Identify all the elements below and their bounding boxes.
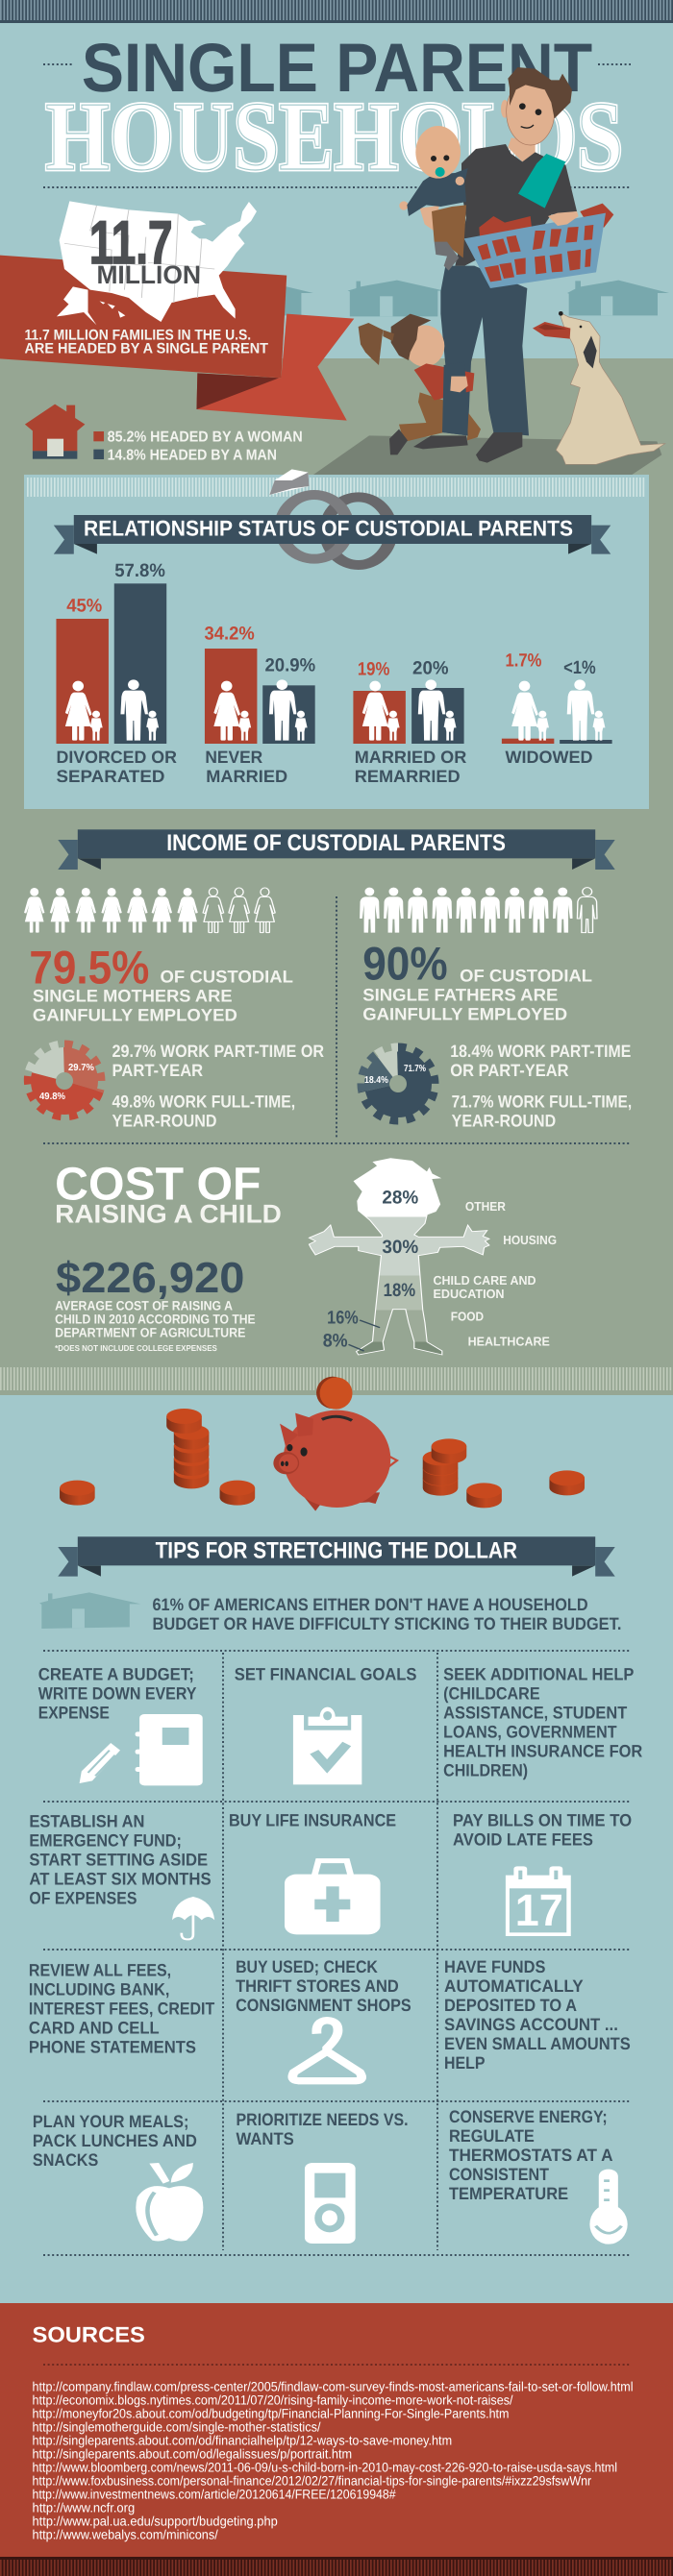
tip: create a budget: EXPENSE	[38, 1703, 110, 1722]
work breakdown: mothers	[112, 1042, 324, 1131]
legend: woman: 85.2% HEADED BY A WOMAN	[108, 428, 303, 445]
footnote: *DOES NOT INCLUDE COLLEGE EXPENSES	[55, 1343, 217, 1353]
child chart labels: OTHER	[465, 1200, 506, 1214]
gear chart: mothers: 29.7%	[68, 1063, 94, 1073]
budget statistic	[152, 1595, 621, 1633]
bars: married or remarried: REMARRIED	[355, 767, 461, 786]
work breakdown: fathers: OR PART-YEAR	[450, 1061, 569, 1080]
sources list	[32, 2379, 633, 2541]
cost description: DEPARTMENT OF AGRICULTURE	[55, 1325, 245, 1339]
legend: man	[93, 446, 277, 463]
girl	[359, 314, 481, 454]
tip: emergency fund: START SETTING ASIDE	[29, 1851, 208, 1870]
tip: review all fees	[29, 1961, 214, 2057]
tip: seek additional help	[443, 1664, 642, 1779]
panel: sources	[0, 2303, 673, 2558]
bars: never married: MARRIED	[206, 767, 287, 786]
sources list: http://singlemotherguide.com/single-mother-statistics/	[32, 2419, 321, 2434]
cost description: CHILD IN 2010 ACCORDING TO THE	[55, 1312, 256, 1326]
laundry basket	[464, 204, 613, 288]
tip: pay bills on time	[453, 1811, 632, 1936]
banner: relationship status	[54, 515, 611, 554]
tip: conserve energy: TEMPERATURE	[449, 2184, 568, 2203]
ribbon caption: ARE HEADED BY A SINGLE PARENT	[24, 339, 268, 356]
red ribbon	[0, 256, 354, 421]
child body chart: 30%	[382, 1237, 418, 1257]
tip: conserve energy: REGULATE	[449, 2126, 535, 2146]
falling coin	[316, 1377, 353, 1410]
bars: married or remarried: 20%	[412, 657, 449, 678]
work breakdown: fathers: YEAR-ROUND	[452, 1112, 556, 1131]
ground: hero and income sections	[0, 358, 673, 1395]
tip: automatic deposits: HAVE FUNDS	[444, 1957, 545, 1976]
child chart labels: CHILD CARE AND	[433, 1274, 536, 1288]
tip: automatic deposits	[444, 1957, 631, 2073]
loose coins	[60, 1470, 585, 1508]
tip: plan your meals: PACK LUNCHES AND	[33, 2131, 197, 2150]
work breakdown: mothers: 49.8% WORK FULL-TIME,	[112, 1092, 295, 1112]
baby	[399, 126, 468, 271]
title dotted rules	[43, 64, 631, 187]
legend: man: 14.8% HEADED BY A MAN	[108, 446, 277, 463]
child body chart: 8%	[323, 1330, 348, 1351]
tip: review all fees: CARD AND CELL	[29, 2019, 160, 2038]
tip: conserve energy	[449, 2107, 628, 2245]
top stripe band	[0, 0, 673, 23]
family illustration	[313, 67, 669, 475]
tip: create a budget: CREATE A BUDGET;	[38, 1664, 194, 1683]
tip: automatic deposits: DEPOSITED TO A	[444, 1996, 577, 2015]
tip: pay bills on time: AVOID LATE FEES	[453, 1830, 593, 1850]
tip: automatic deposits: AUTOMATICALLY	[444, 1976, 584, 1996]
tip grid dotted rules	[43, 1651, 631, 2255]
statistic: mothers	[29, 941, 293, 1025]
panel: relationship status	[24, 475, 649, 809]
statistic: fathers: SINGLE FATHERS ARE	[362, 986, 558, 1005]
background house right	[567, 281, 669, 315]
sources list: http://www.pal.ua.edu/support/budgeting.php	[32, 2514, 278, 2528]
bars: married or remarried: MARRIED OR	[355, 748, 466, 767]
piggy bank	[273, 1411, 397, 1511]
background houses	[258, 281, 444, 316]
stripe band: ground to blue	[0, 1367, 673, 1390]
statistic: mothers: SINGLE MOTHERS ARE	[33, 987, 233, 1006]
income dotted rules	[43, 896, 631, 1143]
bars: never married	[205, 623, 315, 786]
cost description	[55, 1298, 256, 1339]
tips for stretching the dollar	[38, 1536, 642, 1785]
tip: emergency fund: EMERGENCY FUND;	[29, 1831, 182, 1851]
tip: pay bills on time: 17	[515, 1885, 563, 1935]
tip: review all fees: REVIEW ALL FEES,	[29, 1961, 171, 1980]
tip: review all fees: INCLUDING BANK,	[29, 1980, 169, 1999]
tip: seek additional help: (CHILDCARE	[443, 1683, 540, 1703]
tip: plan your meals	[33, 2112, 203, 2241]
statistic: mothers: GAINFULLY EMPLOYED	[33, 1006, 237, 1025]
pictogram: mothers employed	[24, 888, 275, 933]
tip: conserve energy: CONSISTENT	[449, 2165, 549, 2184]
bars: divorced or separated: 45%	[66, 595, 102, 616]
work breakdown: mothers: PART-YEAR	[112, 1061, 203, 1080]
tip: automatic deposits: HELP	[444, 2053, 485, 2073]
banner: tips	[58, 1536, 615, 1577]
sources list: http://www.ncfr.org	[32, 2500, 135, 2515]
title	[45, 29, 623, 190]
ground shadow	[313, 435, 661, 475]
statistic: fathers	[362, 937, 592, 1024]
sources list: http://www.investmentnews.com/article/20120614/FREE/120619948#	[32, 2487, 396, 2501]
ribbon caption: 11.7 MILLION FAMILIES IN THE U.S.	[24, 326, 251, 343]
bars: married or remarried	[353, 657, 466, 786]
child chart labels: EDUCATION	[433, 1288, 505, 1301]
US map with 11.7 million	[24, 201, 268, 356]
tip: buy used: THRIFT STORES AND	[236, 1976, 399, 1996]
sources list: http://singleparents.about.com/od/legalissues/p/portrait.htm	[32, 2446, 352, 2461]
tip: life insurance: BUY LIFE INSURANCE	[229, 1811, 396, 1830]
tip: create a budget: WRITE DOWN EVERY	[38, 1683, 196, 1703]
tip: review all fees: INTEREST FEES, CREDIT	[29, 1999, 214, 2019]
man	[413, 67, 577, 463]
bars: never married: 20.9%	[264, 654, 315, 675]
bars: widowed: 1.7%	[505, 650, 541, 671]
tip: review all fees: PHONE STATEMENTS	[29, 2038, 196, 2057]
house icon and gender split	[25, 405, 303, 463]
bars: widowed	[502, 650, 612, 767]
bars: never married: NEVER	[205, 748, 262, 767]
work breakdown: mothers: YEAR-ROUND	[112, 1112, 216, 1131]
tip: buy used: BUY USED; CHECK	[236, 1957, 378, 1976]
bars: divorced or separated: DIVORCED OR	[56, 748, 177, 767]
tip: emergency fund: AT LEAST SIX MONTHS	[29, 1870, 212, 1889]
bars: divorced or separated	[56, 560, 177, 786]
gear chart: fathers	[361, 1047, 435, 1120]
statistic: fathers: OF CUSTODIAL	[460, 966, 592, 985]
heading: cost of: COST OF	[55, 1158, 261, 1210]
child body chart: 16%	[327, 1307, 359, 1328]
pictogram: fathers employed	[360, 888, 597, 933]
tip: plan your meals: SNACKS	[33, 2150, 98, 2170]
work breakdown: fathers	[450, 1042, 632, 1131]
sources list: http://singleparents.about.com/od/financialhelp/tp/12-ways-to-save-money.htm	[32, 2433, 452, 2447]
child body chart	[309, 1159, 489, 1355]
coin stack right	[423, 1438, 466, 1496]
gear chart: mothers	[28, 1044, 101, 1116]
icon: house	[39, 1592, 140, 1629]
banner: income: INCOME OF CUSTODIAL PARENTS	[166, 830, 506, 855]
child chart labels: FOOD	[451, 1310, 484, 1324]
bars: widowed: <1%	[563, 657, 596, 677]
work breakdown: mothers: 29.7% WORK PART-TIME OR	[112, 1042, 324, 1061]
cost of raising a child	[55, 1158, 557, 1355]
piggy bank and coins	[60, 1377, 585, 1511]
sources list: http://www.webalys.com/minicons/	[32, 2527, 218, 2541]
statistic: mothers: 79.5%	[29, 941, 149, 994]
tip: set financial goals: SET FINANCIAL GOALS	[235, 1664, 416, 1683]
banner: income	[58, 829, 615, 870]
bars: divorced or separated: SEPARATED	[56, 767, 164, 786]
gear chart: mothers: 49.8%	[39, 1092, 65, 1102]
relationship chart	[54, 469, 612, 786]
gear chart: fathers: 18.4%	[364, 1075, 388, 1086]
dog with bowl	[533, 311, 665, 464]
sources heading: SOURCES	[32, 2322, 145, 2347]
bars: widowed: WIDOWED	[505, 748, 593, 767]
tip: create a budget	[38, 1664, 203, 1785]
tips rows two to four	[29, 1811, 632, 2245]
tip: seek additional help: CHILDREN)	[443, 1760, 528, 1779]
child chart labels: HOUSING	[503, 1234, 557, 1247]
tip: emergency fund: ESTABLISH AN	[29, 1812, 144, 1831]
statistic: fathers: GAINFULLY EMPLOYED	[362, 1005, 567, 1024]
legend: woman	[93, 428, 303, 445]
child body chart: 18%	[384, 1280, 415, 1300]
gear chart: fathers: 71.7%	[404, 1064, 426, 1074]
map of United States	[57, 201, 257, 325]
tip: conserve energy: THERMOSTATS AT A	[449, 2146, 613, 2165]
bars: married or remarried: 19%	[358, 658, 389, 679]
bars: never married: 34.2%	[205, 623, 255, 644]
icon: red house	[25, 405, 85, 459]
tip: emergency fund	[29, 1812, 214, 1939]
coin stack left	[166, 1409, 209, 1488]
statistic: fathers: 90%	[362, 937, 448, 990]
child chart labels	[433, 1200, 557, 1349]
bars: divorced or separated: 57.8%	[114, 560, 165, 580]
income section	[24, 829, 632, 1131]
bottom stripe band	[0, 2557, 673, 2576]
tip: buy used: CONSIGNMENT SHOPS	[236, 1996, 411, 2015]
tip: buy used	[236, 1957, 411, 2081]
tip: emergency fund: OF EXPENSES	[29, 1889, 137, 1908]
child chart labels: HEALTHCARE	[468, 1335, 550, 1349]
tip: prioritize needs	[237, 2110, 409, 2244]
heading: raising a child: RAISING A CHILD	[55, 1200, 282, 1229]
icon: wedding rings	[269, 469, 391, 565]
figure 11.7: 11.7	[89, 209, 172, 277]
child body chart: 28%	[382, 1187, 418, 1208]
tip: prioritize needs: PRIORITIZE NEEDS VS.	[237, 2110, 409, 2129]
ribbon caption	[24, 326, 268, 356]
tip: set financial goals	[235, 1664, 416, 1784]
statistic: mothers: OF CUSTODIAL	[161, 967, 293, 986]
figure: cost: $226,920	[56, 1253, 244, 1302]
tip: prioritize needs: WANTS	[237, 2129, 294, 2148]
cost description: AVERAGE COST OF RAISING A	[55, 1298, 233, 1313]
word million: MILLION	[96, 260, 201, 289]
tip: plan your meals: PLAN YOUR MEALS;	[33, 2112, 188, 2131]
tip: life insurance	[229, 1811, 396, 1934]
